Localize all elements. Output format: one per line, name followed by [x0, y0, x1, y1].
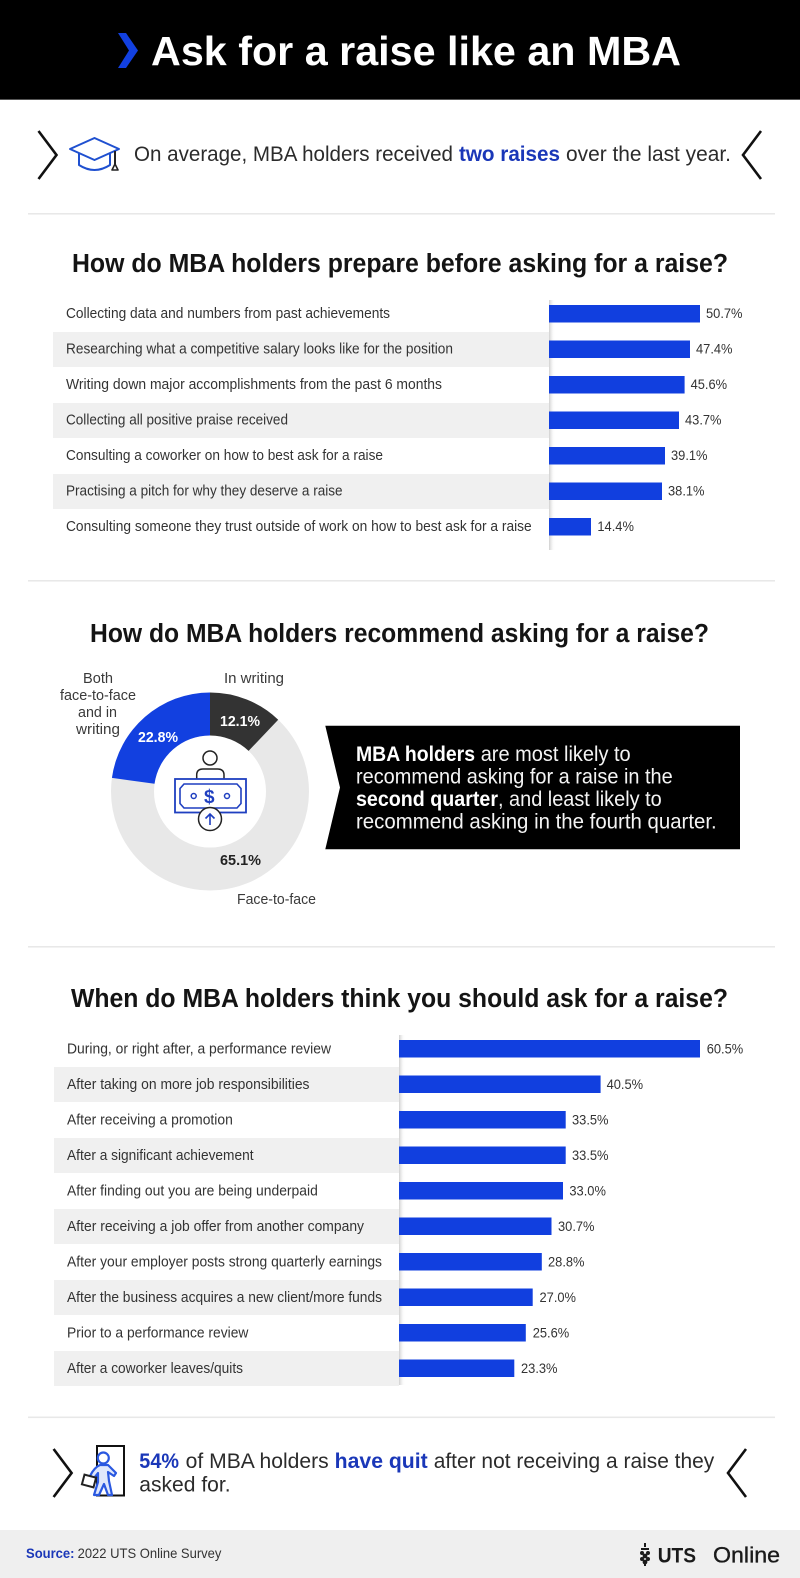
icon: graduation cap — [70, 138, 119, 170]
statement text: On average, MBA holders received — [134, 143, 453, 166]
bar chart: preparation: Writing down major accomplishments from the past 6 months — [66, 377, 442, 393]
icon: left chevron — [38, 131, 56, 179]
bar chart: preparation: Researching what a competitive salary looks like for the position — [66, 342, 453, 358]
icon: person leaving through door — [82, 1446, 124, 1496]
donut chart: 65.1% — [220, 853, 261, 869]
bar chart: timing: 33.5% — [572, 1112, 608, 1128]
statement text: after not receiving a raise they — [434, 1450, 715, 1473]
bar chart: timing: 23.3% — [521, 1360, 558, 1376]
icon: right chevron — [728, 1449, 746, 1497]
bar chart: preparation: 45.6% — [691, 376, 727, 392]
donut chart: In writing — [224, 671, 284, 687]
heading: timing: When do MBA holders think you should ask for a raise? — [71, 985, 728, 1013]
bar chart: timing: 27.0% — [540, 1289, 576, 1305]
bar chart: timing: 28.8% — [548, 1254, 584, 1270]
donut chart: Both — [83, 671, 113, 687]
callout: best quarter: MBA holders — [356, 743, 475, 766]
source — [26, 1545, 221, 1561]
header banner — [0, 0, 800, 100]
bar chart: preparation: 50.7% — [706, 305, 742, 321]
donut chart: 12.1% — [220, 714, 260, 730]
bar chart: timing: During, or right after, a performance review — [67, 1042, 332, 1058]
callout: have quit — [54, 1446, 746, 1497]
icon: blue chevron — [118, 33, 138, 68]
bar chart: timing: Prior to a performance review — [67, 1326, 249, 1342]
callout: two raises — [38, 131, 761, 179]
callout: best quarter — [325, 726, 740, 849]
bar chart: timing: After receiving a promotion — [67, 1112, 233, 1128]
bar chart: timing: After your employer posts strong quarterly earnings — [67, 1254, 382, 1270]
bar chart: preparation: Collecting all positive praise received — [66, 412, 288, 428]
bar chart: preparation: Collecting data and numbers from past achievements — [66, 306, 390, 322]
bar chart: timing: 33.0% — [569, 1182, 606, 1198]
bar chart: timing: 60.5% — [707, 1040, 743, 1056]
icon: left chevron — [54, 1449, 72, 1497]
bar chart: timing: After a coworker leaves/quits — [67, 1361, 243, 1377]
icon: person with banknote — [175, 751, 246, 830]
bar chart: timing: After finding out you are being underpaid — [67, 1184, 318, 1200]
bar chart: preparation: Consulting a coworker on how to best ask for a raise — [66, 448, 383, 464]
donut chart: writing — [75, 722, 120, 738]
footer — [0, 1530, 800, 1578]
bar chart: timing: After taking on more job responsibilities — [67, 1077, 310, 1093]
donut chart: and in — [78, 705, 117, 721]
callout: best quarter: , and least likely to — [498, 788, 662, 811]
logo: UTS Online: Online — [713, 1543, 780, 1568]
bar chart: timing: After the business acquires a new client/more funds — [67, 1290, 382, 1306]
donut chart: face-to-face — [60, 688, 136, 704]
panel: preparation — [53, 250, 742, 550]
panel: recommendation — [60, 620, 740, 908]
bar chart: timing: After receiving a job offer from another company — [67, 1219, 365, 1235]
bar chart: preparation: Consulting someone they trust outside of work on how to best ask for a raise — [66, 519, 532, 535]
statement text: of MBA holders — [186, 1450, 329, 1473]
donut chart — [60, 671, 316, 908]
statement text: 54% — [139, 1450, 179, 1473]
source: Source: — [26, 1545, 74, 1561]
bar chart: preparation: 47.4% — [696, 340, 732, 356]
bar chart: timing: After a significant achievement — [67, 1148, 254, 1164]
bar chart: preparation: Practising a pitch for why they deserve a raise — [66, 484, 343, 500]
bar chart: timing — [54, 1035, 743, 1386]
bar chart: preparation: 14.4% — [597, 518, 634, 534]
bar chart: preparation: 39.1% — [671, 447, 708, 463]
logo: UTS Online — [640, 1543, 780, 1568]
statement text: asked for. — [139, 1474, 231, 1496]
bar chart: preparation: 38.1% — [668, 482, 704, 498]
bar chart: timing: 33.5% — [572, 1147, 608, 1163]
callout: best quarter: recommend asking for a raise in the — [356, 766, 673, 788]
callout: best quarter: second quarter — [356, 788, 498, 811]
statement text — [139, 1450, 715, 1496]
bar chart: preparation: 43.7% — [685, 412, 722, 428]
callout: best quarter: recommend asking in the fourth quarter. — [356, 810, 717, 834]
donut chart: 22.8% — [138, 730, 178, 746]
statement text: two raises — [459, 143, 560, 166]
statement text: have quit — [335, 1450, 428, 1473]
logo: UTS Online: UTS — [658, 1545, 696, 1568]
bar chart: timing: 30.7% — [558, 1218, 594, 1234]
source: 2022 UTS Online Survey — [78, 1545, 221, 1561]
callout: best quarter: are most likely to — [481, 743, 631, 766]
bar chart: timing: 25.6% — [533, 1324, 569, 1340]
statement text — [134, 143, 731, 166]
heading: preparation: How do MBA holders prepare before asking for a raise? — [72, 250, 728, 278]
bar chart: preparation — [53, 300, 742, 550]
bar chart: timing: 40.5% — [607, 1076, 643, 1092]
donut chart: Face-to-face — [237, 892, 316, 908]
panel: timing — [54, 985, 743, 1386]
title: Ask for a raise like an MBA — [151, 28, 681, 74]
icon: person with banknote: $ — [204, 787, 215, 808]
icon: right chevron — [743, 131, 761, 179]
heading: recommendation: How do MBA holders recommend asking for a raise? — [90, 620, 709, 648]
statement text: over the last year. — [566, 143, 731, 166]
